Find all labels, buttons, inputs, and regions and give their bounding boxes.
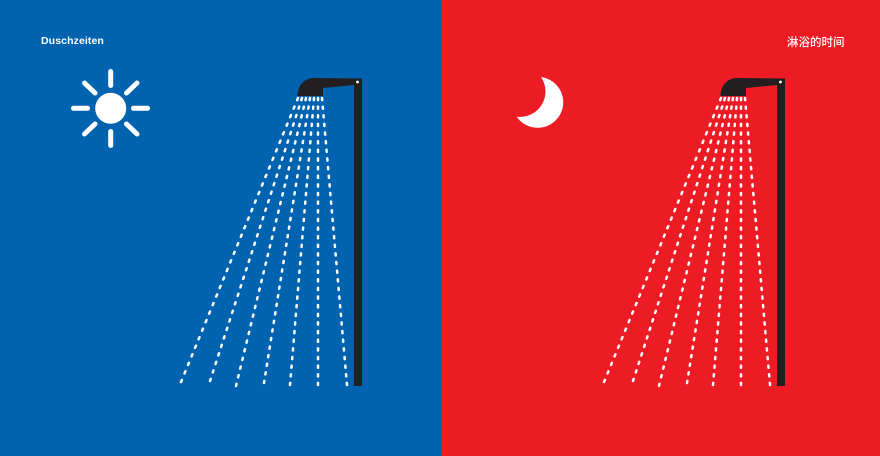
- heading: Chinese: 淋浴的时间: [787, 37, 844, 49]
- icon: crescent moon: [517, 77, 563, 128]
- heading: German: Duschzeiten: [41, 35, 104, 47]
- icon: shower (red panel): [604, 78, 785, 386]
- icon: shower (blue panel): [181, 78, 362, 386]
- shower head and pole: [298, 78, 362, 386]
- icon: sun: [74, 72, 148, 146]
- shower water: [181, 98, 347, 386]
- panel: red nighttime: [442, 0, 880, 456]
- shower water: [604, 98, 770, 386]
- shower head and pole: [720, 78, 785, 386]
- panel: blue daytime: [0, 0, 442, 456]
